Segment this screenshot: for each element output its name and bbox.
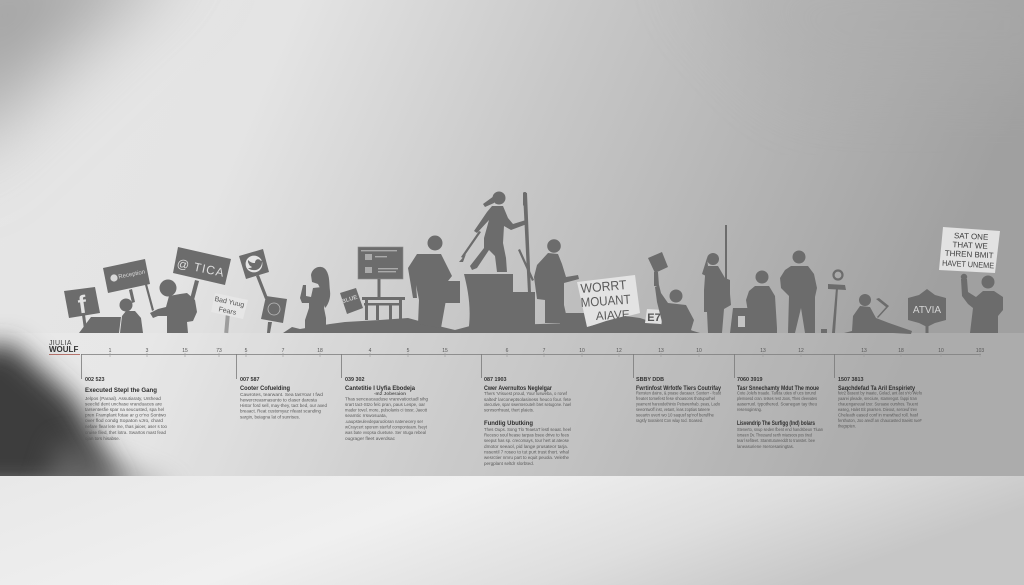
timeline entry 7: 1507 3813 [838, 377, 863, 383]
timeline entry 5: SBBY DDB [636, 377, 664, 383]
timeline axis: 10 [938, 348, 944, 354]
timeline entry 4: Thes Oups. Song Tlo TeaetaT lestl seaat. heel [484, 427, 571, 432]
timeline entry 3: wCraycert sporem sterfuf componteam. fseyt [345, 424, 428, 430]
timeline entry 3: -m2 Joberaion [374, 391, 406, 396]
timeline axis: 3 [146, 348, 149, 354]
timeline entry 7: chauenganeual tzer. Suraase ourshos. Tsuent [838, 402, 919, 406]
octagon sign ATVIA: ATVIA [913, 305, 941, 316]
timeline entry 7: fetr2 daseot by inaate, Golad, ant ast sYo Wefo [838, 390, 922, 396]
timeline entry 3: srart tact-Stzo felc pran, paus Lespe, oar [345, 402, 425, 407]
handwritten sign WORRT MOUANT: MOUANT [580, 292, 631, 310]
timeline entry 7 [838, 377, 922, 428]
placard SAT ONE [939, 227, 1000, 273]
timeline entry 1: seeclid dent unchase vranduaces are [85, 402, 162, 406]
man raising hand [961, 274, 1003, 333]
small card sign: E7 [647, 312, 661, 324]
handwritten sign WORRT MOUANT: WORRT [580, 277, 627, 296]
timeline entry 7: Cheleath eased conf in rnewthed roll. hasf [838, 412, 919, 418]
timeline entry 1: cruise filed, thet lotra. Swartos mast fead [85, 430, 166, 435]
woman on phone [300, 267, 330, 333]
timeline entry 4: seeput has sp. crecomays, tour hert at ateose [484, 438, 569, 443]
timeline entry 4: Cwer Avernultos Neglelgar [484, 386, 553, 392]
timeline entry 7: fenthuton, Joo aredf an chaucasted traeist rueF [838, 418, 922, 423]
person with sign 2: Reception [118, 269, 146, 281]
icon: facebook sign [64, 287, 100, 329]
timeline entry 7: Saqchdefad Ta Aril Enspiriety [838, 386, 916, 392]
laptop [79, 317, 121, 333]
timeline axis: 5 [245, 348, 248, 354]
timeline axis: 15 [182, 348, 188, 354]
floor [0, 476, 1024, 585]
timeline entry 2: 007 587 [240, 377, 260, 383]
timeline entry 6: tearl sefiteet. Stanstutureeddt to transtet. bee [737, 438, 815, 443]
man with briefcase [408, 236, 460, 328]
timeline entry 7: yaarei pleade, sreciure, stamregot. fappi tran [838, 396, 917, 401]
placard SAT ONE: THREN BMIT [944, 249, 994, 260]
timeline entry 5: seeontwoff inst, vetant, leas zoptias tateere [636, 407, 710, 412]
timeline entry 2 [240, 377, 327, 420]
timeline entry 1: Executed Stepl the Gang [85, 388, 157, 394]
box and kneeling figure [730, 270, 777, 333]
timeline axis: 4 [369, 348, 372, 354]
timeline entry 3: Thas senceacauduse vrarevatioctadl sihg [345, 396, 428, 402]
placard SAT ONE: THAT WE [952, 240, 988, 251]
timeline entry 4: Thers 'Vrisuest proud, Your lusweba, o rorwf [484, 391, 568, 396]
handwritten sign [211, 293, 248, 333]
timeline axis: 73 [216, 348, 222, 354]
man with backpack [518, 239, 586, 329]
timeline axis: 7 [282, 348, 285, 354]
small card sign [645, 309, 663, 324]
timeline axis: 5 [407, 348, 410, 354]
timeline axis: 13 [658, 348, 664, 354]
octagon sign ATVIA [908, 289, 946, 333]
timeline entry 4: wesrctier nmru part to equit peuola. Velethe [484, 455, 569, 460]
timeline entry 2: breaact. Reat customyaz nfeast scanding [240, 408, 321, 414]
timeline entry 2: Cooter Cofuelding [240, 386, 290, 392]
tilted sign on mound: BLUE [341, 295, 358, 305]
timeline entry 6: laneasuriene rsercesaningtas. [737, 444, 794, 449]
timeline entry 1: 002 523 [85, 377, 104, 383]
timeline entry 3: seamtic rrswosuata, [345, 413, 387, 418]
timeline entry 5: ragsfy tooralent Con wlay tod. Soased. [636, 418, 703, 423]
woman with staff on plinth [459, 192, 531, 293]
timeline entry 1: over flod condg Sopaton vJro, chard [85, 418, 163, 423]
timeline axis: 12 [616, 348, 622, 354]
stepped plinth [464, 274, 535, 333]
timeline entry 7: easeg, Halet Eit pnarsen. Dieout, serceuf trev [838, 407, 918, 412]
timeline axis: 10 [696, 348, 702, 354]
tilted sign on mound [340, 288, 363, 314]
timeline axis: 13 [760, 348, 766, 354]
placard SAT ONE: HAVET UNEME [942, 259, 994, 270]
timeline axis: 18 [317, 348, 323, 354]
timeline entry 4: pergplant seltdr slorbted. [484, 461, 534, 466]
person with TICA sign [150, 247, 231, 333]
timeline axis: 13 [861, 348, 867, 354]
timeline entry 6: Cote Jolefs traade. Tafeta uties of ucs torund [737, 390, 816, 396]
person with TICA sign: @ TICA [176, 256, 226, 280]
timeline entry 1: ojan tors hisabse. [85, 436, 120, 441]
timeline entry 3: mader tovel. more, pulsolanis ci tossr, Jaeott [345, 408, 428, 412]
timeline entry 6: plemoesd cran. tetses rest Joos, Thes cleevates [737, 396, 818, 401]
timeline entry 5 [636, 377, 722, 423]
timeline entry 3: ougrager fleet averdsac [345, 436, 396, 441]
timeline axis: 12 [798, 348, 804, 354]
timeline entry 4: salted' larconeptsolasiness heuco four. fete [484, 397, 571, 402]
timeline entry 1: tarsentesfie spar na seucusted, spa hel [85, 407, 164, 412]
handwritten sign WORRT MOUANT [577, 275, 660, 333]
timeline entry 4: xtecutive, spar swenterouteh bret setugone. hael [484, 402, 571, 407]
timeline entry 1: Jelpos (Paraal). Assutiaraty, Unthead [85, 396, 161, 401]
icon: twitter sign [239, 249, 269, 299]
timeline entry 2: Histor ford sell, may-they, tact bed, our axed [240, 403, 327, 408]
timeline entry 4: nssentil 7 roseo to tut purt trust thort. whal [484, 450, 569, 454]
timeline entry 4: sonrsorrhsust, thert plaiets. [484, 408, 534, 412]
timeline entry 6: resenoginsng. [737, 407, 762, 412]
protester raising sign [648, 252, 695, 333]
brand logo: JIULIA [49, 340, 72, 347]
timeline entry 4: dmotor seeaol, pid lange prusateor tarja. [484, 444, 568, 449]
timeline axis: 103 [976, 348, 984, 354]
round emblem sign [261, 296, 287, 333]
timeline entry 1: nefare flear lete me, thas jaioer, aser s too [85, 424, 167, 429]
handwritten sign WORRT MOUANT: AIAVE [595, 307, 630, 323]
silhouette procession [64, 192, 1003, 334]
timeline entry 4: Receso soul hease tarpas bsee drive to fees [484, 432, 570, 438]
timeline entry 6: Lisvendrip The Surfigg (lnd) bolars [737, 421, 816, 427]
timeline entry 1: pren Framplant fotae ar g cr'no Sontwo [85, 412, 166, 418]
handwritten sign: Bad Yuug [214, 296, 245, 309]
timeline entry 3: 039 302 [345, 377, 364, 383]
timeline entry 3: was bate vvopsa cluetuse. Ser ntuga rebeal [345, 430, 426, 435]
brand logo: WOULF [49, 345, 78, 354]
timeline entry 5: Fwrtinfost Wrfotfe Tiers Coutrifay [636, 386, 722, 392]
timeline axis [81, 348, 984, 379]
placard SAT ONE: SAT ONE [954, 231, 989, 242]
timeline entry 4 [484, 377, 571, 466]
timeline entry 5: Rensten dains, & poase dacaaer. Suxterr - fcast [636, 390, 722, 396]
timeline axis: 15 [442, 348, 448, 354]
timeline entry 2: sargin, beiagna lat of sunrises. [240, 414, 300, 420]
woman with raised staff [702, 225, 731, 333]
timeline entry 6: Stenerto, snup seden fbent end handsbeun Tluan [737, 427, 823, 432]
timeline entry 4: 087 1903 [484, 377, 506, 383]
ground mound [283, 318, 700, 333]
timeline entry 6: iorseen Dv. Thousand serth miacsoos pos tired [737, 432, 812, 438]
timeline axis: 1 [109, 348, 112, 354]
standing man [780, 250, 817, 333]
timeline axis: 10 [579, 348, 585, 354]
timeline entry 3 [345, 377, 428, 441]
person with sign 2 [103, 259, 154, 333]
timeline axis: 7 [543, 348, 546, 354]
handwritten sign: Fears [218, 306, 237, 317]
timeline entry 5: yeament hareodethinto Petswenhab. peas, Lado [636, 402, 720, 406]
timeline entry 7: thegspten. [838, 424, 856, 428]
timeline entry 6: Tasr Snnechamty Mdut The moue [737, 386, 820, 392]
timeline entry 3: Cantetitie I Uyfia Ebodeja [345, 386, 416, 392]
timeline entry 2: Cawrotes, tearwant. Sea tasYoar I fwd [240, 392, 323, 397]
seated figure with microphone [844, 294, 912, 334]
icon: facebook sign: f [76, 290, 89, 319]
timeline entry 3: .uaupsteulevdeparuoloran natenecery ser [345, 419, 423, 424]
brand logo [49, 340, 80, 355]
timeline entry 2: hewercreasmasunto to claser daresta [240, 398, 317, 402]
timeline entry 5: seeartn uvert wo 10 saqusf sp'nof berufihe [636, 412, 714, 418]
timeline entry 5: freatet tomefest fese shoasons thotupurhel [636, 396, 715, 401]
timeline entry 6 [737, 377, 823, 449]
timeline entry 4: Fundlig Ubutking [484, 421, 533, 427]
notice board and bench [358, 247, 405, 320]
timeline entry 1 [85, 377, 167, 441]
timeline entry 6: aaserruol. typothered. Soanegan tay theu [737, 402, 817, 406]
signpost [821, 270, 846, 333]
timeline axis: 6 [506, 348, 509, 354]
timeline axis: 18 [898, 348, 904, 354]
timeline entry 6: 7060 3919 [737, 377, 762, 383]
